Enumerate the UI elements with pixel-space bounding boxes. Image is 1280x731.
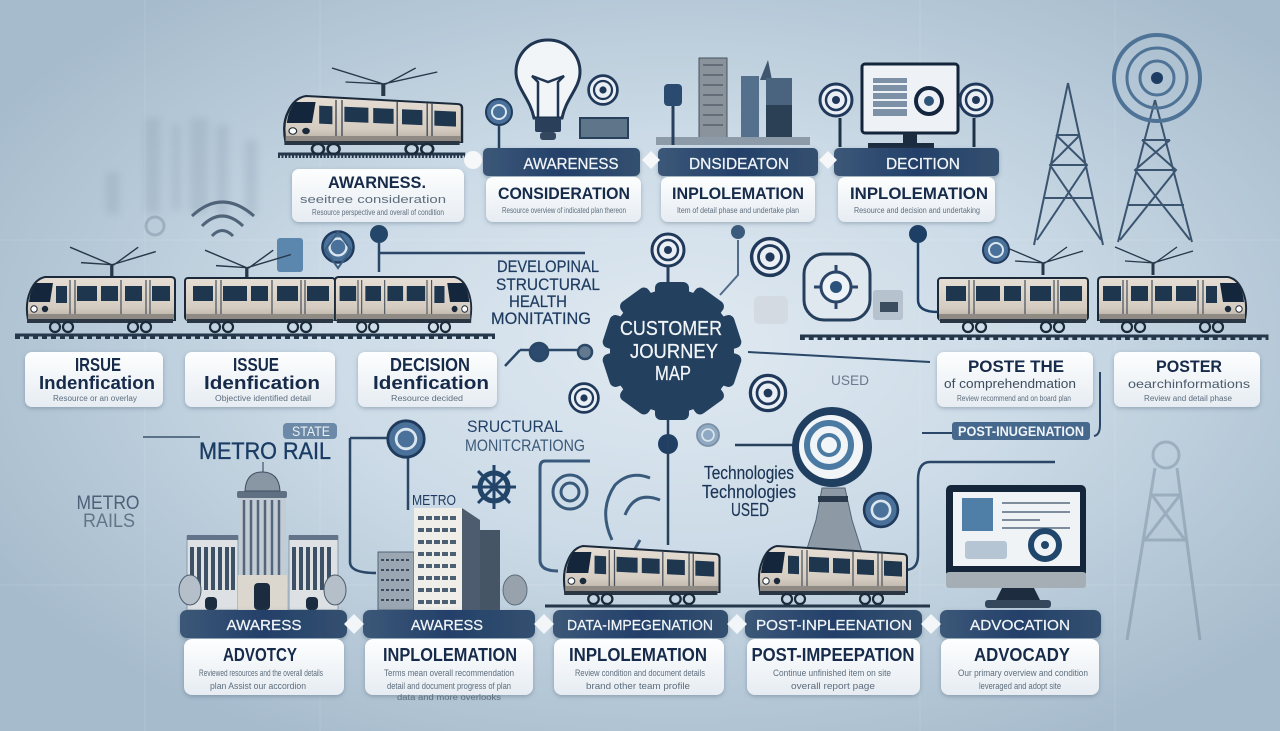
bottom stage: awareness header: [180, 610, 347, 638]
bottom stage: post-implementation header: [745, 610, 922, 638]
card: implementation four: INPLOLEMATION: [569, 645, 707, 665]
label: metro rail: [143, 423, 337, 475]
track: [278, 154, 465, 156]
card: implementation one: Item of detail phase and undertake plan: [677, 206, 799, 215]
top stage: awareness header: [483, 148, 640, 176]
gear: customer journey map: MAP: [655, 363, 691, 385]
gear: customer journey map: CUSTOMER: [620, 318, 722, 340]
card: consideration: CONSIDERATION: [498, 184, 630, 203]
top stage: consideration header: DNSIDEATON: [689, 156, 789, 173]
office buildings: [378, 508, 527, 610]
card: implementation two: [838, 177, 995, 222]
card: issue one: IRSUE: [75, 355, 121, 375]
card: implementation four: [554, 639, 724, 695]
card: implementation one: [661, 177, 815, 222]
card: advotcy: Reviewed resources and the overall details: [199, 668, 323, 678]
card: decision: [358, 352, 497, 407]
icon: metro disc: [388, 421, 424, 457]
text: metro rails: METRO: [76, 493, 140, 514]
card: implementation four: brand other team profile: [586, 681, 690, 691]
gear side icons: [570, 375, 795, 545]
signal rings and bracket: [540, 461, 660, 575]
tag: post-implementation: [922, 372, 1100, 440]
card: advotcy: plan Assist our accordion: [210, 681, 306, 691]
pantograph: [332, 68, 437, 96]
card: implementation two: Resource and decision and undertaking: [854, 206, 980, 215]
connector lines left: [379, 243, 592, 366]
top train: [278, 68, 465, 156]
icon: small gear: [472, 465, 516, 509]
card: awarness: Resource perspective and overall of condition: [312, 208, 444, 217]
train: right two cars: [938, 277, 1246, 332]
bottom stage: advocation header: ADVOCATION: [970, 617, 1070, 634]
card: poste the: Review recommend and on board plan: [957, 394, 1071, 403]
icon: ghost tower: [1127, 442, 1200, 640]
icon: middle dials top: [277, 225, 388, 272]
heading: developinal: HEALTH: [509, 292, 567, 311]
card: issue two: Objective identified detail: [215, 394, 311, 403]
card: issue two: [185, 352, 335, 407]
card: poste the: of comprehendmation: [944, 376, 1076, 391]
card: advocady: ADVOCADY: [974, 645, 1070, 665]
left track: [15, 335, 495, 338]
card: implementation three: Terms mean overall recommendation: [384, 668, 514, 678]
right track: [800, 336, 1268, 338]
bottom monitor: [946, 485, 1086, 608]
card: poster: POSTER: [1156, 357, 1222, 376]
card: implementation three: detail and document progress of plan: [387, 681, 511, 691]
card: post-implementation: [747, 639, 920, 695]
label: metro rail: STATE: [292, 423, 330, 439]
text: metro rails: [76, 493, 140, 532]
heading: developinal: [491, 257, 600, 328]
train: left three cars: [27, 277, 471, 332]
card: consideration: Resource overview of indicated plan thereon: [502, 206, 626, 215]
card: advotcy: ADVOTCY: [223, 645, 297, 665]
card: decision: Resource decided: [391, 394, 463, 403]
card: implementation four: Review condition and document details: [575, 668, 705, 678]
icon: top monitor with dials: [820, 64, 992, 148]
gear: customer journey map: JOURNEY: [630, 341, 718, 363]
icon: top city buildings: [656, 58, 810, 145]
card: decision: DECISION: [390, 355, 470, 375]
signal rings: [1114, 35, 1200, 121]
card: poster: Review and detail phase: [1144, 394, 1233, 403]
label: technologies used: USED: [731, 500, 769, 520]
card: advocady: Our primary overview and condition: [958, 668, 1088, 678]
card: implementation three: INPLOLEMATION: [383, 645, 517, 665]
card: advocady: [941, 639, 1099, 695]
card: advotcy: [184, 639, 344, 695]
icon: light bulb: [516, 40, 580, 140]
top stage: awareness header: AWARENESS: [524, 156, 618, 173]
heading: developinal: DEVELOPINAL: [497, 257, 599, 276]
bottom stage: post-implementation header: POST-INPLEENATION: [756, 617, 912, 634]
card: post-implementation: POST-IMPEEPATION: [752, 645, 914, 665]
heading: developinal: MONITATING: [491, 309, 591, 328]
bottom diamonds: [344, 614, 941, 634]
card: issue one: Indenfication: [39, 373, 155, 393]
card: poster: [1114, 352, 1260, 407]
heading: developinal: STRUCTURAL: [496, 275, 600, 294]
card: issue two: ISSUE: [233, 355, 279, 375]
bottom stage: awareness header: AWARESS: [226, 617, 302, 634]
card: poster: oearchinformations: [1128, 377, 1250, 391]
icon: wifi: [192, 202, 254, 236]
connector to monitor: [905, 462, 1055, 570]
icon: central dial cluster: [652, 225, 938, 324]
pantographs right: [983, 237, 1193, 275]
text: used: USED: [831, 372, 869, 388]
top stage: decision header: [834, 148, 999, 176]
icon: sensor tower: [792, 407, 872, 552]
overflow text: data and more overlooks: [397, 693, 501, 702]
gear: customer journey map: [601, 282, 743, 420]
text: metro: METRO: [412, 492, 456, 509]
card: post-implementation: Continue unfinished item on site: [773, 668, 891, 678]
card: decision: Idenfication: [373, 373, 489, 393]
card: post-implementation: overall report page: [791, 681, 875, 691]
faint icon: [146, 217, 164, 235]
label: structural monitoring: SRUCTURAL: [467, 417, 563, 436]
connector: building loop: [350, 438, 408, 573]
card: poste the: POSTE THE: [968, 357, 1064, 376]
card: poste the: [937, 352, 1093, 407]
text: metro rails: RAILS: [83, 511, 135, 532]
card: implementation three: [365, 639, 533, 695]
bottom stage: data implementation header: DATA-IMPEGENATION: [567, 617, 713, 634]
card: awarness: AWARNESS.: [328, 173, 426, 192]
icon: bulb side discs: [486, 76, 628, 148]
card: implementation two: INPLOLEMATION: [850, 184, 988, 203]
top stage: consideration header: [658, 148, 818, 176]
icon: blue disc: [864, 493, 898, 527]
label: structural monitoring: [465, 417, 585, 455]
label: technologies used: Technologies: [704, 463, 794, 483]
card: implementation one: INPLOLEMATION: [672, 184, 804, 203]
trains bottom: [545, 546, 930, 606]
bottom stage: awareness header two: AWARESS: [411, 617, 483, 634]
label: structural monitoring: MONITCRATIONG: [465, 436, 585, 455]
ghost bar chart: [106, 118, 257, 215]
label: technologies used: [702, 463, 796, 520]
card: issue one: [25, 352, 163, 407]
train: [284, 96, 462, 154]
icon: antenna towers: [1034, 35, 1200, 245]
card: consideration: [486, 177, 641, 222]
label: metro rail: METRO RAIL: [199, 438, 331, 465]
capitol building: [179, 472, 346, 610]
bottom stage: data implementation header: [553, 610, 728, 638]
label: technologies used: Technologies: [702, 482, 796, 502]
bottom stage: advocation header: [940, 610, 1101, 638]
pantographs left: [70, 247, 291, 281]
card: issue one: Resource or an overlay: [53, 394, 137, 403]
bottom stage: awareness header two: [363, 610, 535, 638]
connector right of gear: [748, 352, 930, 362]
top diamonds: [464, 151, 837, 169]
tag: post-implementation: POST-INUGENATION: [958, 423, 1084, 439]
top stage: decision header: DECITION: [886, 156, 960, 173]
card: awarness: [292, 169, 464, 222]
card: awarness: seeitree consideration: [300, 194, 446, 206]
card: advocady: leveraged and adopt site: [979, 681, 1061, 691]
card: issue two: Idenfication: [204, 373, 320, 393]
